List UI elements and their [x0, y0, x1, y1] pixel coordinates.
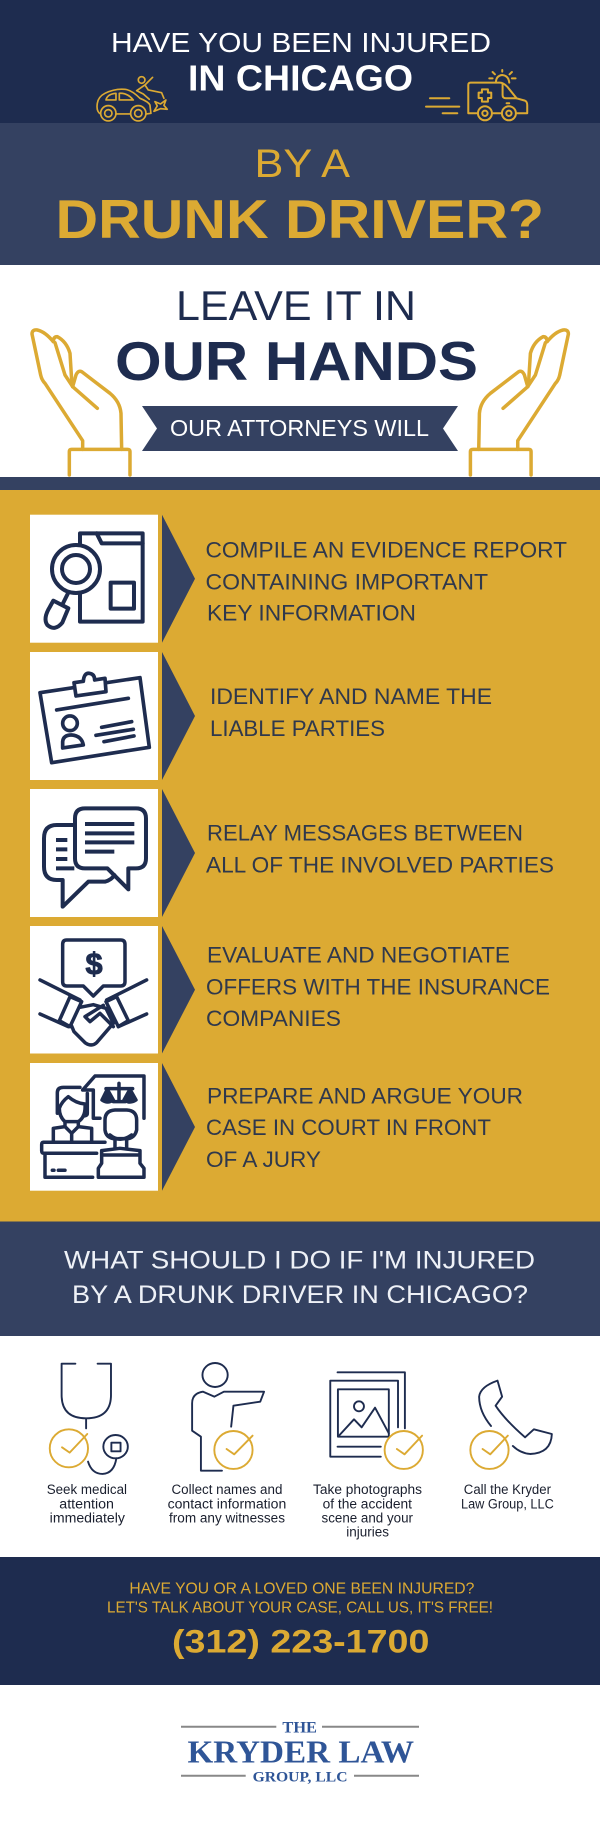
icon: courtroom [42, 1076, 144, 1177]
icon: ambulance [426, 70, 527, 120]
panel: what should I do: BY A DRUNK DRIVER IN CHICAGO? [72, 1281, 528, 1309]
panel: what should I do [0, 1222, 600, 1336]
panel: leave it in our hands [0, 265, 600, 477]
step 4: negotiate offers [30, 926, 550, 1054]
icon: left hand [32, 330, 130, 475]
text: seek medical attention [47, 1482, 127, 1526]
heading: have you been injured: HAVE YOU BEEN INJURED [111, 27, 491, 58]
step 3: relay messages [30, 789, 554, 917]
icon: right hand [470, 330, 568, 475]
icon: handshake and dollar [40, 940, 147, 1045]
text: seek medical attention: Seek medical [47, 1482, 127, 1497]
text: step 3 [206, 821, 554, 878]
panel: call to action [0, 1557, 600, 1685]
text: step 4: COMPANIES [206, 1006, 341, 1031]
text: step 4 [206, 943, 550, 1031]
icon: id badge [40, 673, 149, 763]
logo: the kryder law group: KRYDER LAW [188, 1733, 414, 1769]
logo: the kryder law group: THE [282, 1719, 317, 1736]
panel: call to action: HAVE YOU OR A LOVED ONE BEEN INJURED? [129, 1580, 475, 1597]
text: take photographs: injuries [346, 1525, 389, 1540]
step 5: court [30, 1063, 523, 1191]
text: collect names: from any witnesses [169, 1511, 285, 1526]
step 2: liable parties [30, 652, 492, 780]
text: step 2: LIABLE PARTIES [210, 716, 385, 741]
panel: by a drunk driver [0, 123, 600, 265]
text: step 5 [206, 1084, 523, 1172]
divider band [0, 477, 600, 490]
text: call the firm: Call the Kryder [464, 1482, 551, 1497]
logo: the kryder law group [181, 1719, 419, 1786]
text: take photographs: scene and your [322, 1511, 413, 1526]
text: take photographs: of the accident [323, 1496, 412, 1511]
text: step 3: RELAY MESSAGES BETWEEN [207, 821, 523, 846]
icon: handshake and dollar: $ [85, 947, 103, 981]
text: call the firm: Law Group, LLC [461, 1496, 554, 1511]
step 1: evidence report [30, 515, 567, 643]
heading: our hands: OUR HANDS [115, 330, 478, 392]
text: seek medical attention: attention [59, 1496, 114, 1511]
text: step 2 [210, 684, 492, 741]
text: collect names: Collect names and [172, 1482, 282, 1497]
panel: call to action: LET'S TALK ABOUT YOUR CASE, CALL US, IT'S FREE! [107, 1599, 493, 1616]
icon: car accident [97, 77, 167, 121]
panel: advice icons [47, 1363, 554, 1540]
icon: phone [470, 1381, 552, 1469]
text: step 1: COMPILE AN EVIDENCE REPORT [206, 538, 567, 563]
logo: the kryder law group: GROUP, LLC [253, 1770, 348, 1786]
text: step 5: CASE IN COURT IN FRONT [206, 1115, 491, 1140]
icon: folder and magnifier [46, 533, 143, 628]
ribbon: our attorneys will: OUR ATTORNEYS WILL [170, 415, 429, 441]
text: step 3: ALL OF THE INVOLVED PARTIES [206, 853, 554, 878]
panel: header [0, 0, 600, 123]
text: step 2: IDENTIFY AND NAME THE [210, 684, 492, 709]
text: step 1 [206, 538, 567, 626]
ribbon: our attorneys will [142, 406, 458, 451]
icon: stethoscope [50, 1364, 128, 1474]
icon: witness pointing [192, 1363, 264, 1471]
heading: drunk driver: DRUNK DRIVER? [56, 188, 544, 250]
text: step 5: PREPARE AND ARGUE YOUR [207, 1084, 523, 1109]
text: call the firm [461, 1482, 554, 1511]
text: step 5: OF A JURY [206, 1147, 321, 1172]
heading: leave it in: LEAVE IT IN [176, 282, 416, 329]
icon: speech bubbles [44, 808, 146, 907]
text: collect names: contact information [168, 1496, 286, 1511]
text: take photographs: Take photographs [313, 1482, 422, 1497]
text: collect names [168, 1482, 286, 1526]
phone number: (312) 223-1700 [172, 1624, 429, 1660]
text: step 1: CONTAINING IMPORTANT [206, 570, 488, 595]
text: seek medical attention: immediately [50, 1511, 125, 1526]
text: step 1: KEY INFORMATION [207, 601, 416, 626]
text: step 4: EVALUATE AND NEGOTIATE [207, 943, 510, 968]
heading: in chicago: IN CHICAGO [188, 58, 413, 98]
panel: what should I do: WHAT SHOULD I DO IF I'M INJURED [64, 1246, 535, 1274]
panel: attorney tasks [0, 490, 600, 1222]
text: take photographs [313, 1482, 422, 1540]
heading: by a: BY A [254, 142, 350, 186]
text: step 4: OFFERS WITH THE INSURANCE [206, 975, 550, 1000]
icon: photographs [330, 1372, 423, 1469]
